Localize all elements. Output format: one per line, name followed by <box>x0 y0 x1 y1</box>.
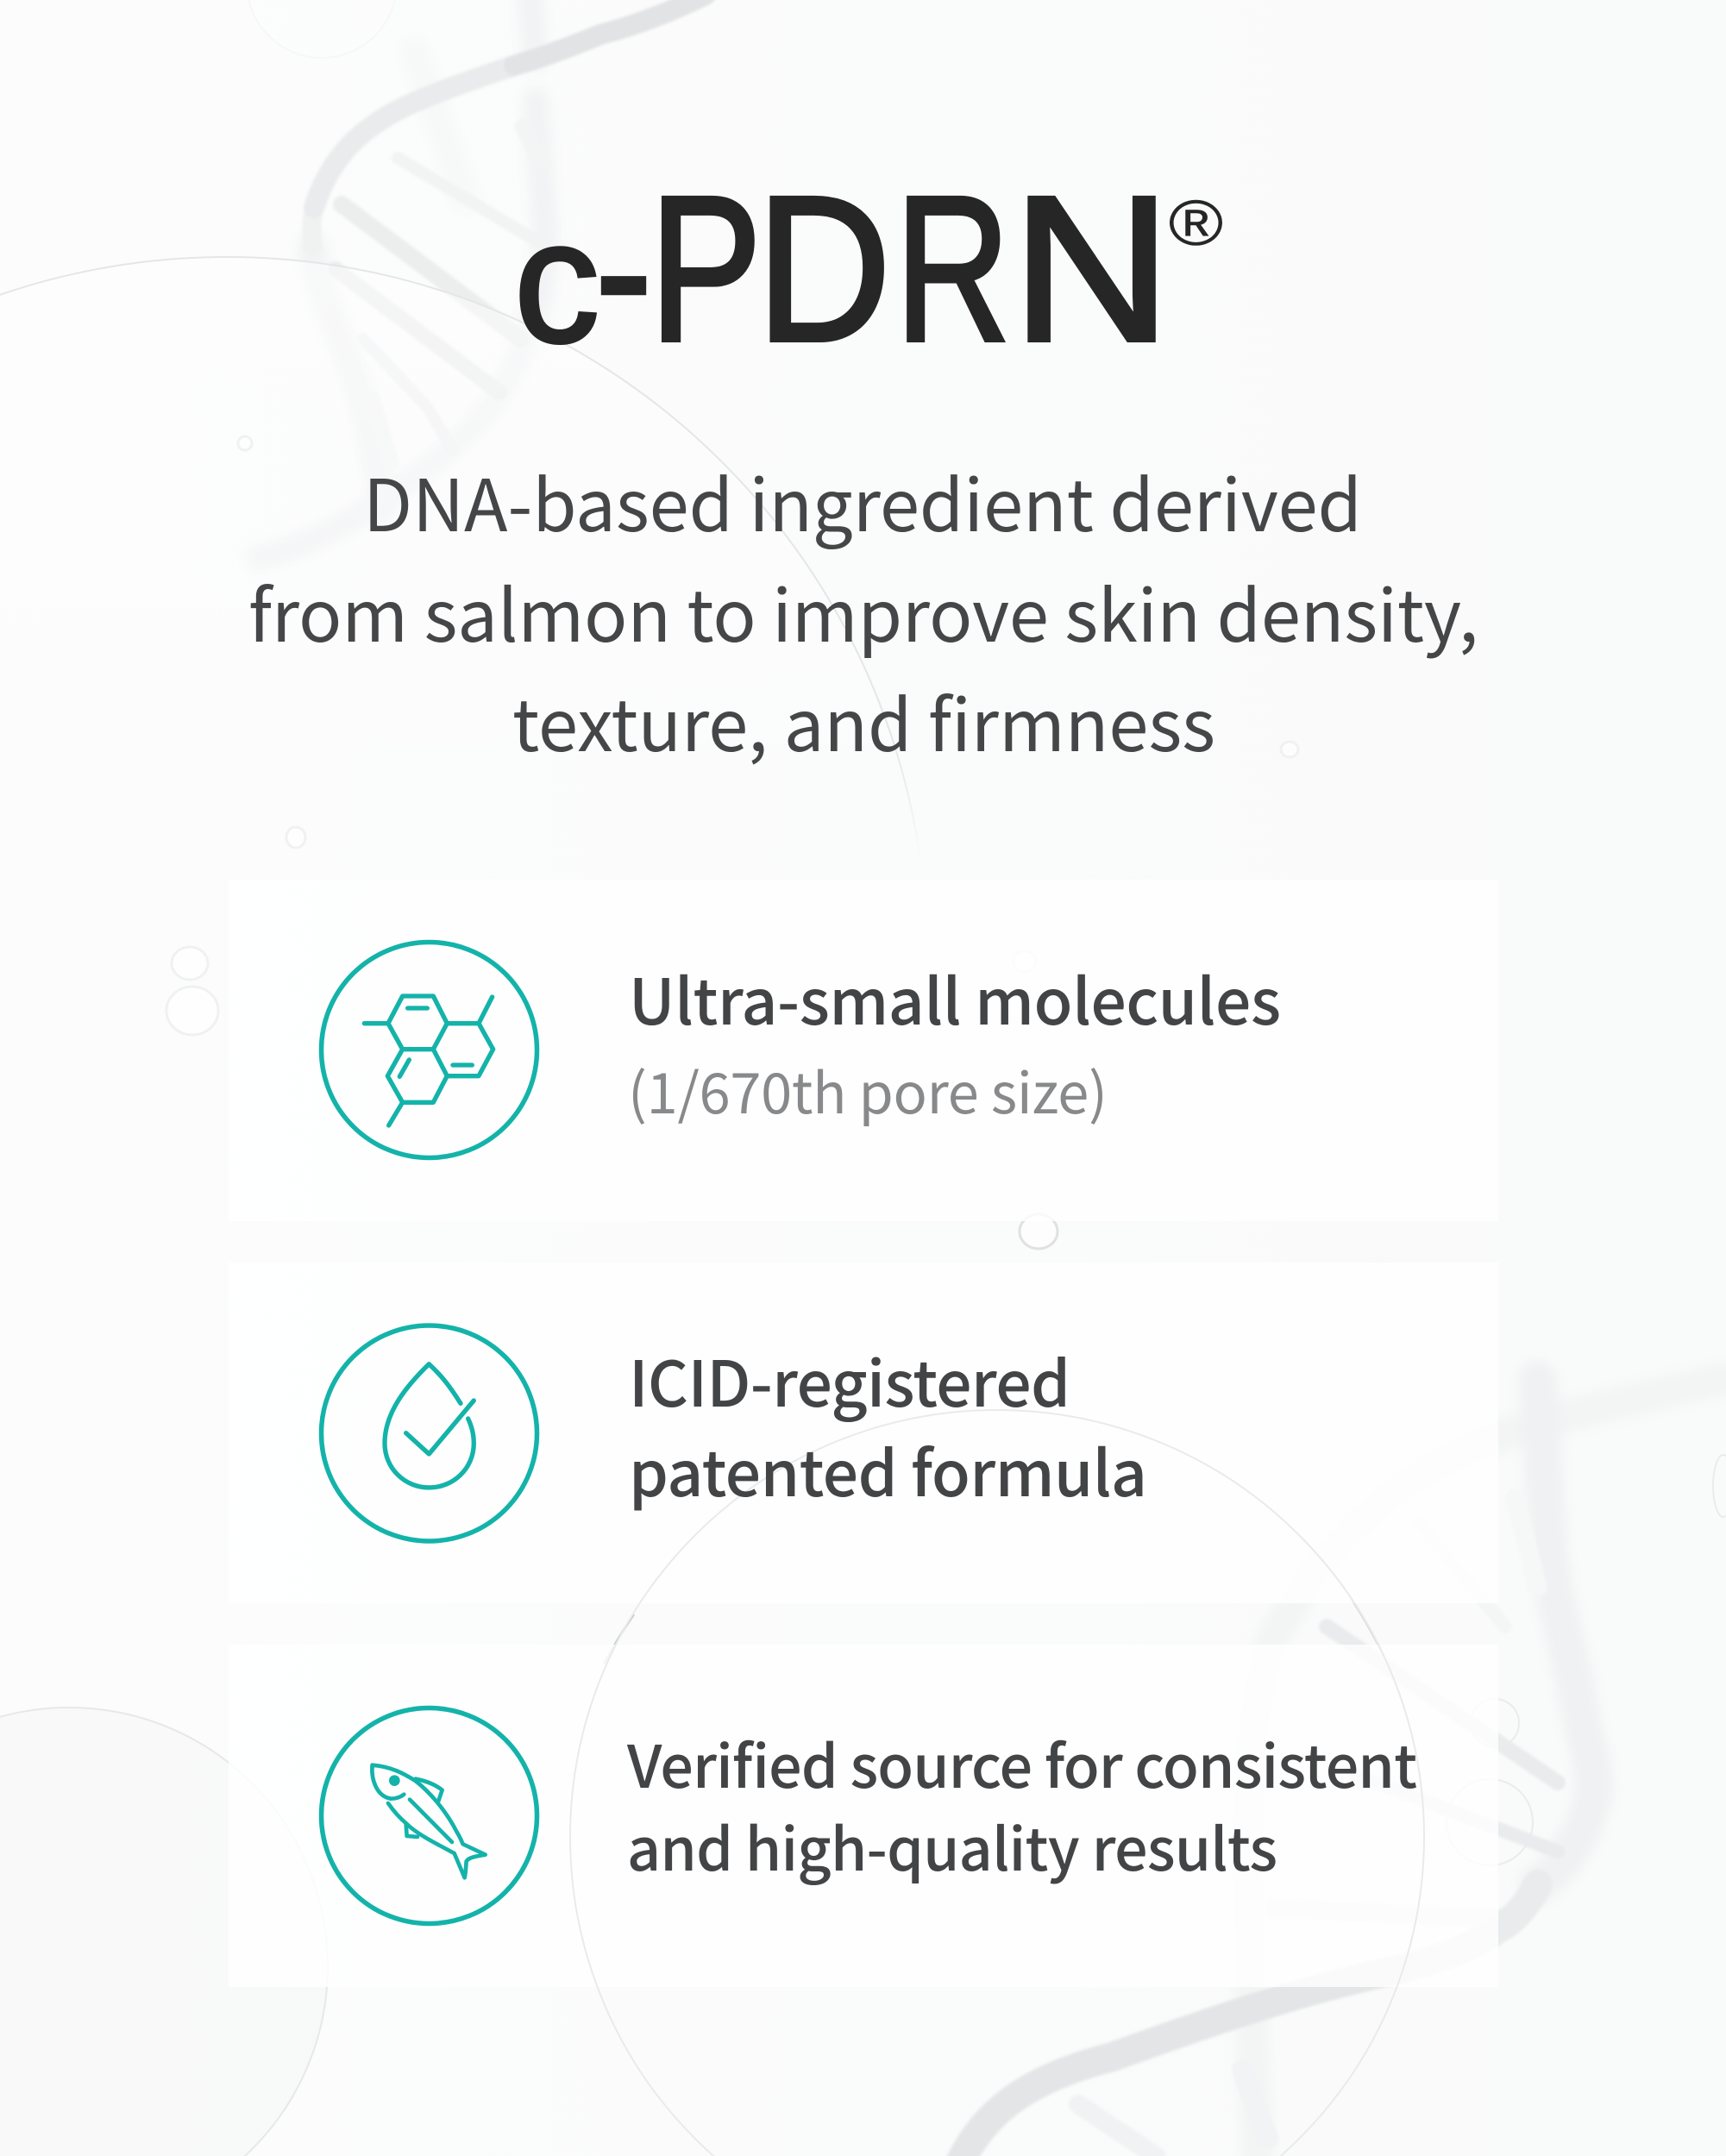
background: disc edge highlights <box>604 1598 1384 1664</box>
background: lower DNA helix <box>959 1276 1726 2156</box>
background: glass rings on lower helix <box>1447 1455 1726 1865</box>
text: ultra-small molecules: (1/670th pore size) <box>628 1049 1108 1130</box>
title: ® <box>1169 187 1223 259</box>
background: glass disc lower left <box>0 1708 328 2156</box>
text: ultra-small molecules <box>628 952 1281 1130</box>
text: verified source <box>626 1720 1417 1888</box>
panel: ICID-registered formula <box>229 1263 1498 1603</box>
title: D <box>756 154 891 385</box>
background: small disc top <box>247 0 397 58</box>
subtitle text: DNA-based ingredient derived <box>363 448 1362 552</box>
text: verified source: Verified source for consistent <box>626 1720 1417 1805</box>
title: c <box>514 184 599 379</box>
panel: verified source <box>229 1645 1498 1987</box>
icon: drop with check <box>321 1326 537 1541</box>
title <box>514 151 1223 386</box>
panel: ultra-small molecules <box>229 880 1498 1221</box>
text: ultra-small molecules: Ultra-small molecules <box>629 952 1281 1044</box>
icon: fish <box>321 1708 537 1923</box>
background: upper DNA helix <box>259 0 706 558</box>
title: R <box>895 154 1010 385</box>
text: verified source: and high-quality results <box>627 1802 1277 1888</box>
text: ICID-registered patented formula: patented formula <box>629 1424 1147 1515</box>
subtitle text <box>248 448 1478 772</box>
title: P <box>650 154 762 385</box>
background: large glass disc upper left <box>0 257 927 1658</box>
background: water droplets <box>166 436 1298 1249</box>
subtitle text: texture, and firmness <box>512 668 1215 772</box>
text: ICID-registered patented formula: ICID-registered <box>629 1334 1070 1426</box>
title: N <box>1012 154 1171 385</box>
icon: molecule <box>321 942 537 1157</box>
title: - <box>594 151 653 386</box>
background: large glass disc lower center <box>570 1410 1424 2156</box>
text: ICID-registered patented formula <box>629 1334 1147 1515</box>
subtitle text: from salmon to improve skin density, <box>248 559 1478 662</box>
